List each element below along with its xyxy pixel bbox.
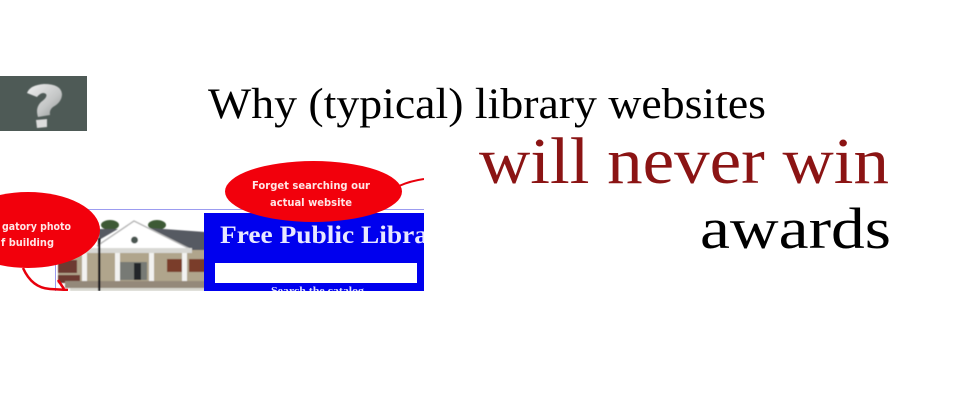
screenshot frame bbox=[55, 209, 424, 291]
callout: building photo: gatory photo bbox=[2, 221, 71, 233]
library name: Free Public Libra bbox=[220, 222, 429, 249]
blue catalog panel bbox=[204, 213, 429, 297]
infographic canvas bbox=[0, 76, 889, 291]
callout: building photo bbox=[0, 192, 100, 290]
icon: question mark tile bbox=[0, 76, 87, 131]
callout: search: actual website bbox=[270, 197, 352, 209]
callout: search: Forget searching our bbox=[252, 180, 371, 192]
callout pointer bbox=[23, 268, 68, 290]
search box bbox=[215, 263, 417, 283]
title line 2: will never win bbox=[479, 125, 889, 198]
callout pointer bbox=[399, 179, 424, 186]
title line 3: awards bbox=[700, 196, 891, 261]
search caption: Search the catalog bbox=[271, 285, 365, 297]
title line 1: Why (typical) library websites bbox=[208, 81, 766, 128]
website screenshot bbox=[0, 161, 429, 297]
building photo bbox=[58, 220, 205, 291]
callout: building photo: f building bbox=[1, 237, 54, 249]
callout: search bbox=[225, 161, 424, 222]
